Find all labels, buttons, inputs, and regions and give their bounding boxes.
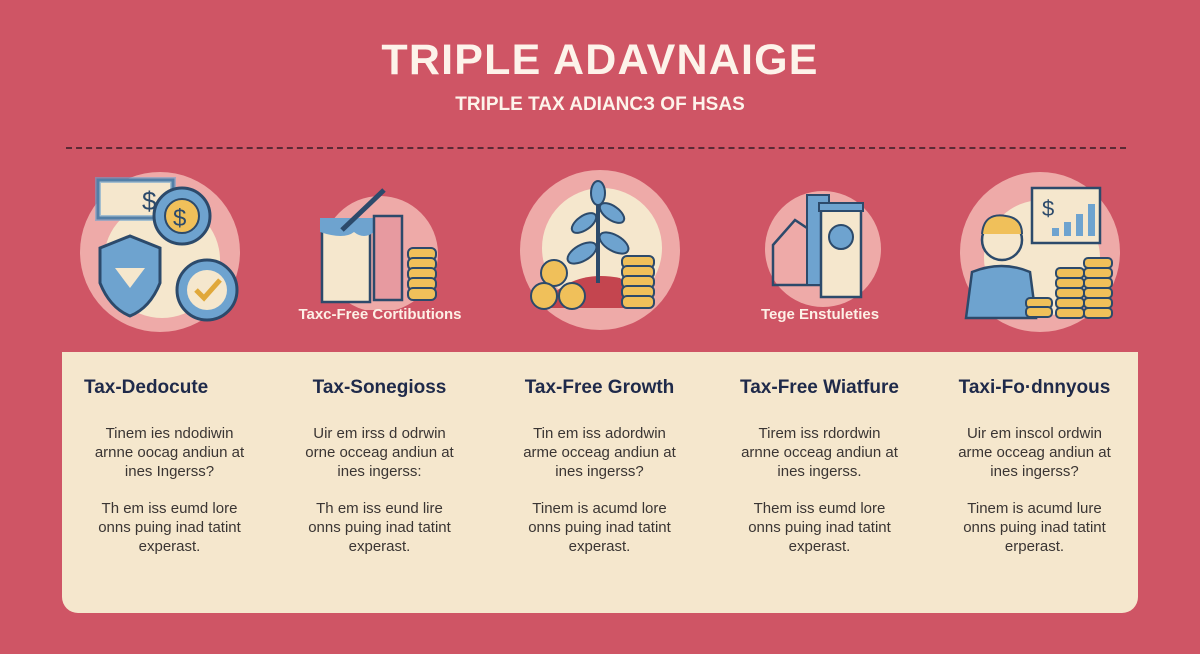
column 1: Th em iss eumd lore	[102, 500, 237, 517]
column 3: experast.	[569, 538, 630, 555]
column 1: Tax-Dedocute	[84, 377, 208, 398]
column 5: erperast.	[1005, 538, 1064, 555]
icon: money shield check: $	[142, 186, 157, 216]
column 4: Tax-Free Wiatfure	[740, 377, 899, 398]
column 5: ines ingerss?	[990, 463, 1079, 480]
column 5: Taxi-Fo·dnnyous	[959, 377, 1110, 398]
column 5: onns puing inad tatint	[963, 519, 1106, 536]
column 1: ines Ingerss?	[125, 463, 214, 480]
column 5: arme occeag andiun at	[958, 444, 1111, 461]
column 2: Th em iss eund lire	[316, 500, 443, 517]
column 1: Tinem ies ndodiwin	[106, 425, 233, 442]
icon: building	[765, 191, 881, 307]
column 1	[84, 377, 244, 555]
column 4: ines ingerss.	[777, 463, 862, 480]
icon: money shield check	[80, 172, 240, 332]
column 2: ines ingerss:	[337, 463, 422, 480]
column 2: orne occeag andiun at	[305, 444, 454, 461]
column 4: arnne occeag andiun at	[741, 444, 898, 461]
column 3: ines ingerss?	[555, 463, 644, 480]
column 5: Uir em inscol ordwin	[967, 425, 1102, 442]
column 4: Tirem iss rdordwin	[759, 425, 880, 442]
panel: details	[62, 352, 1138, 613]
column 3	[523, 377, 676, 555]
column 5	[958, 377, 1111, 555]
subtitle: TRIPLE TAX ADIANCЗ OF HSAS	[455, 94, 745, 115]
icon: person chart coins: $	[1042, 196, 1054, 221]
column 3: onns puing inad tatint	[528, 519, 671, 536]
icon: person chart coins	[960, 172, 1120, 332]
column 1: experast.	[139, 538, 200, 555]
column 2: experast.	[349, 538, 410, 555]
icon: plant growth	[520, 170, 680, 330]
column 4: experast.	[789, 538, 850, 555]
title: TRIPLE ADAVNAIGE	[381, 36, 819, 84]
column 2	[305, 377, 454, 555]
icon: money shield check: $	[173, 205, 186, 232]
column 2: Uir em irss d odrwin	[313, 425, 446, 442]
label: enstuleties: Tege Enstuleties	[761, 306, 879, 323]
icon: contributions	[320, 188, 438, 310]
column 3: arme occeag andiun at	[523, 444, 676, 461]
label: contributions: Taxc-Free Cortibutions	[298, 306, 462, 323]
column 4	[740, 377, 899, 555]
column 3: Tax-Free Growth	[525, 377, 674, 398]
column 3: Tinem is acumd lore	[532, 500, 667, 517]
column 3: Tin em iss adordwin	[533, 425, 666, 442]
column 5: Tinem is acumd lure	[967, 500, 1102, 517]
column 2: Tax-Sonegioss	[313, 377, 446, 398]
column 1: onns puing inad tatint	[98, 519, 241, 536]
column 2: onns puing inad tatint	[308, 519, 451, 536]
column 4: onns puing inad tatint	[748, 519, 891, 536]
column 4: Them iss eumd lore	[754, 500, 885, 517]
column 1: arnne oocag andiun at	[95, 444, 244, 461]
